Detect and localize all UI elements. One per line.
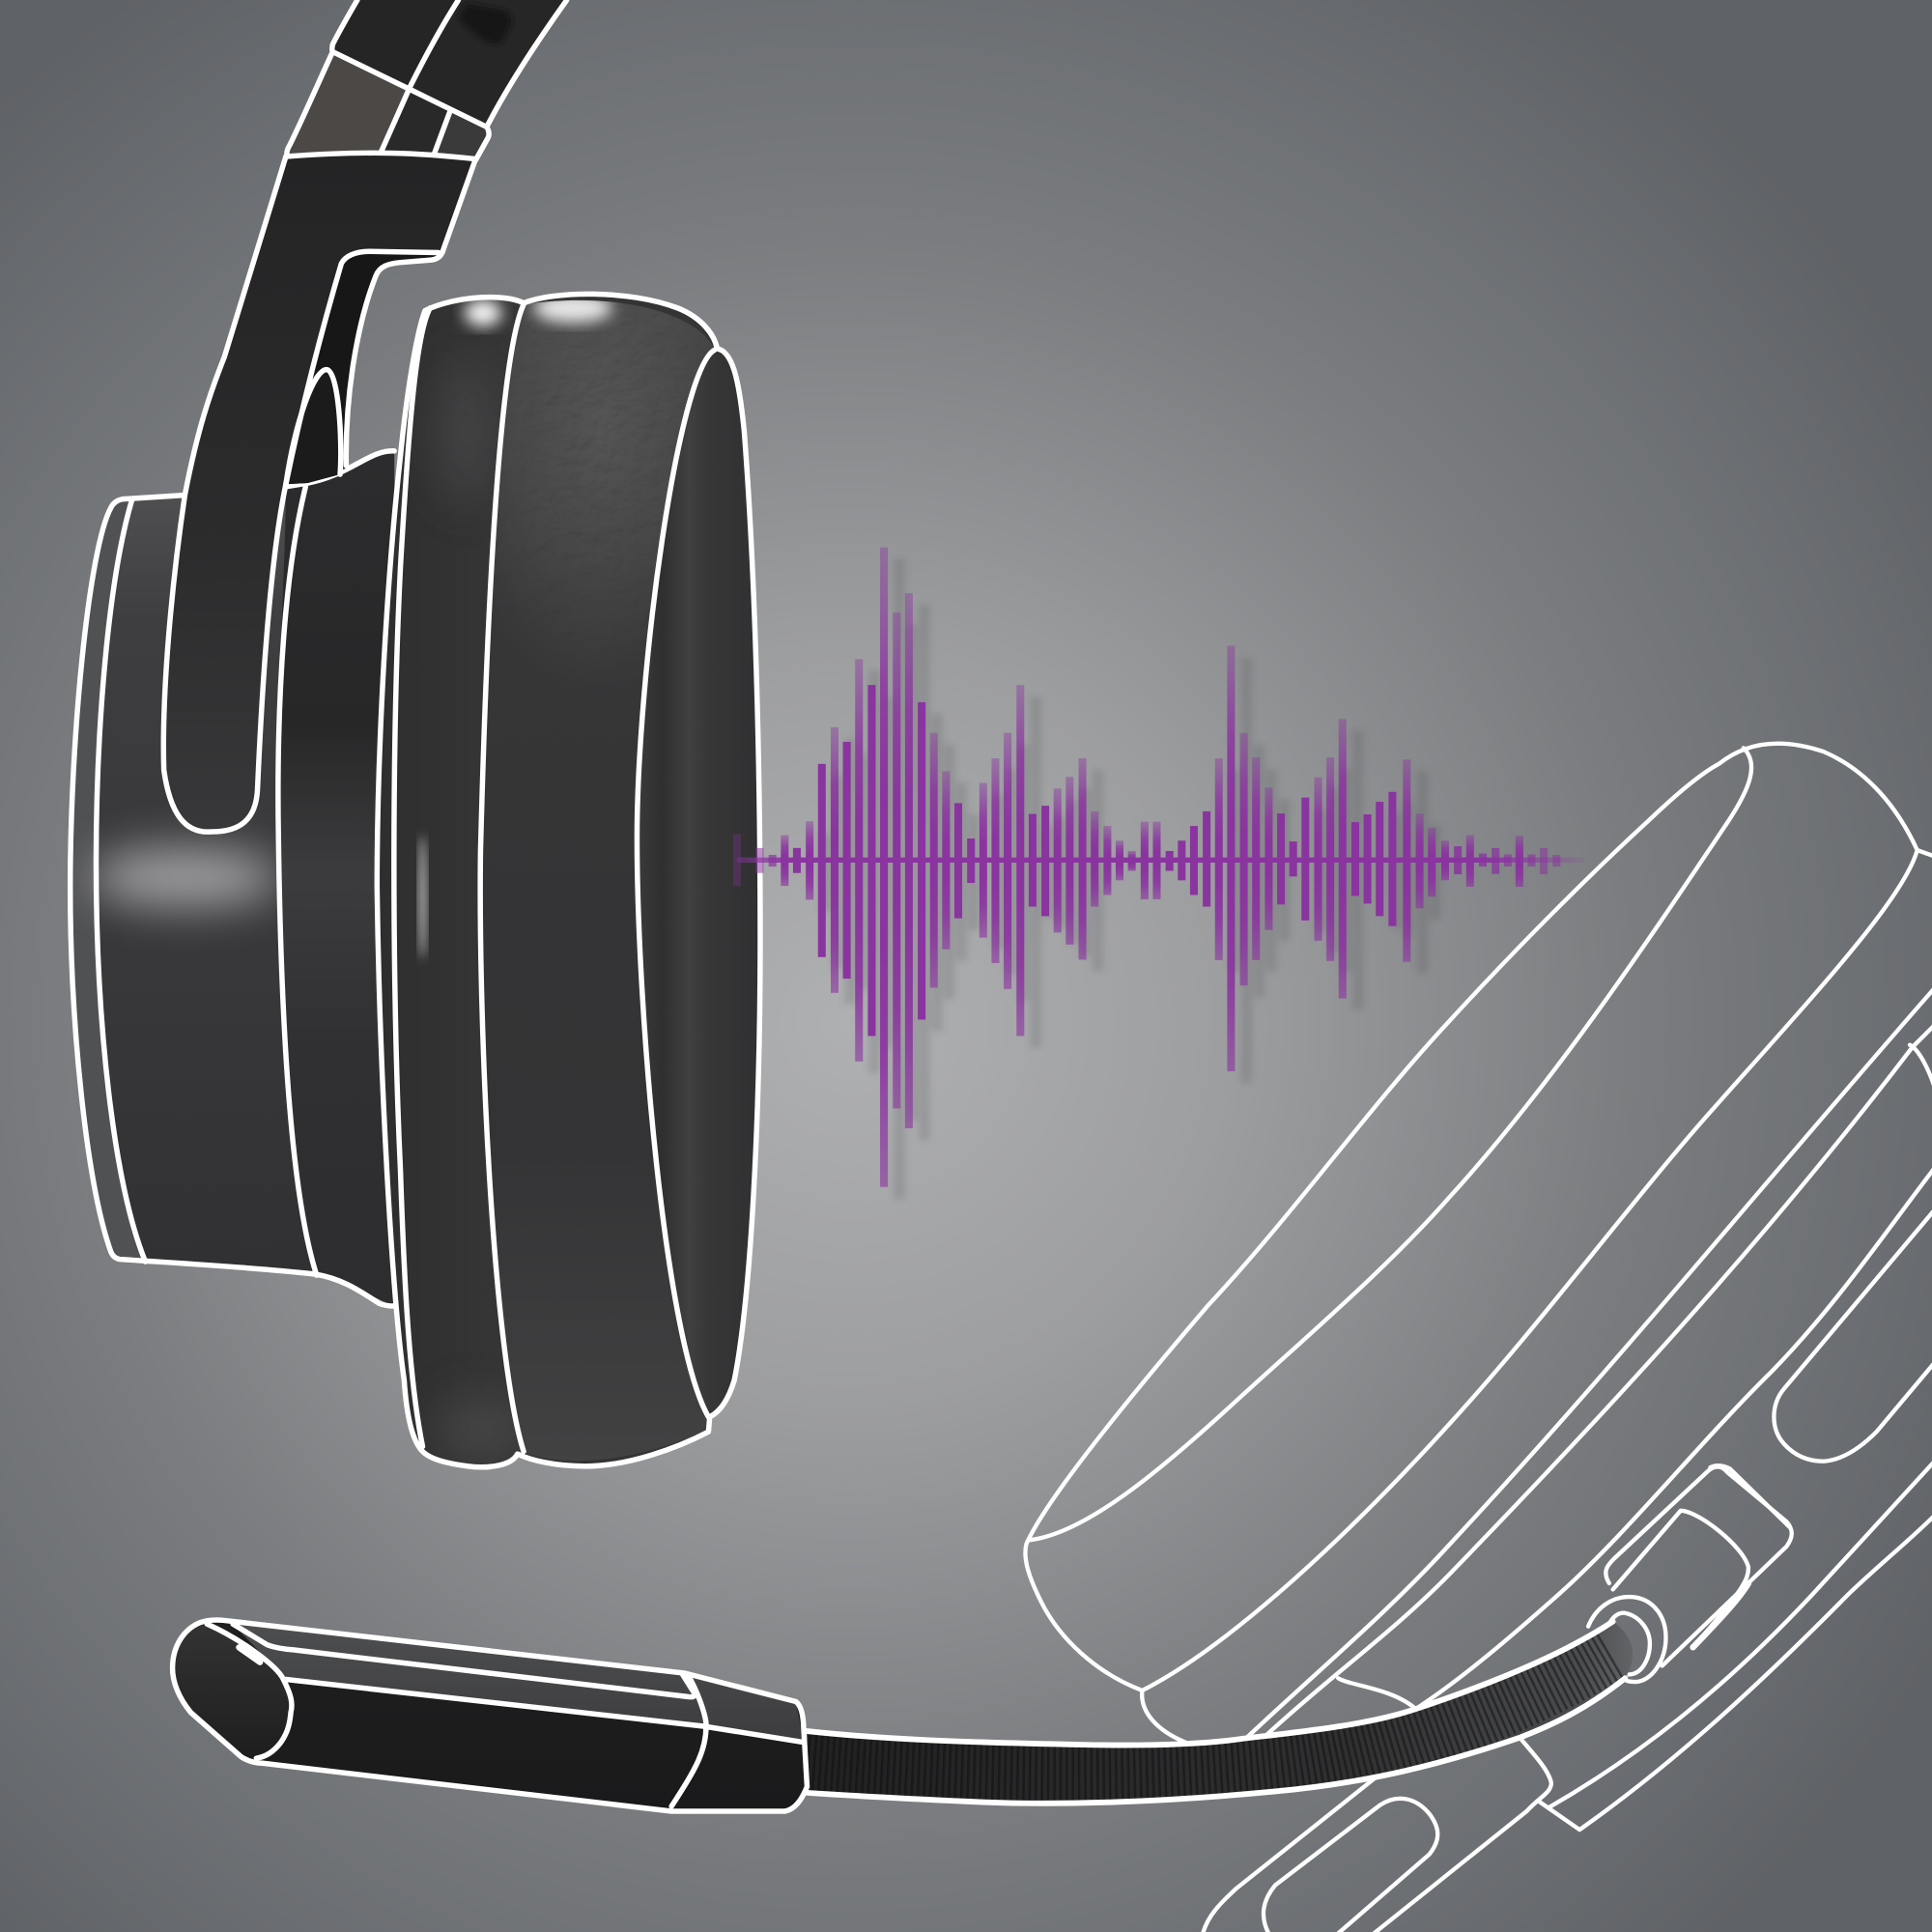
ear pad (377, 283, 764, 1491)
ear pad outline (1025, 744, 1932, 1743)
cup inner band (278, 451, 397, 1306)
pad front ring (637, 350, 760, 1417)
yoke below boom (1203, 1739, 1551, 1932)
headband segment upper right (411, 0, 567, 127)
pad face leather (496, 299, 713, 1461)
headband slider button (458, 4, 512, 43)
headband rails (1244, 988, 1932, 1830)
headband end panel (434, 111, 489, 159)
right headset line drawing (1025, 744, 1932, 1932)
boom socket ring (1588, 1597, 1665, 1682)
yoke lobe (286, 370, 341, 484)
ear cup back (71, 451, 397, 1306)
boom microphone (173, 1620, 1633, 1811)
microphone capsule (173, 1620, 807, 1811)
cup outlines (71, 496, 394, 1306)
inner yoke dark part (286, 251, 440, 484)
tube outline (807, 1622, 1625, 1804)
waveform bars (733, 548, 1584, 1187)
yoke outlines (286, 153, 475, 466)
sound waveform (733, 548, 1584, 1199)
capsule outlines (173, 1620, 807, 1811)
capsule end cap (173, 1624, 292, 1758)
headband segment upper left (332, 0, 458, 86)
flexible boom tube (801, 1622, 1633, 1804)
side slot (1774, 1210, 1932, 1462)
tube ribbing (801, 1645, 1608, 1773)
yoke body (163, 153, 475, 832)
cup highlight (71, 500, 281, 1262)
grey slider panel (287, 52, 411, 156)
capsule upper panels (223, 1620, 804, 1743)
yoke arm (163, 153, 475, 832)
left headset rendered (71, 0, 764, 1491)
headband white lines (287, 0, 567, 160)
control button (1605, 1465, 1792, 1665)
headband centre panel (381, 89, 450, 153)
pad side highlights (419, 299, 524, 1460)
waveform shadow (821, 559, 1439, 1199)
pad outlines (377, 294, 760, 1467)
headband top section (287, 0, 567, 160)
